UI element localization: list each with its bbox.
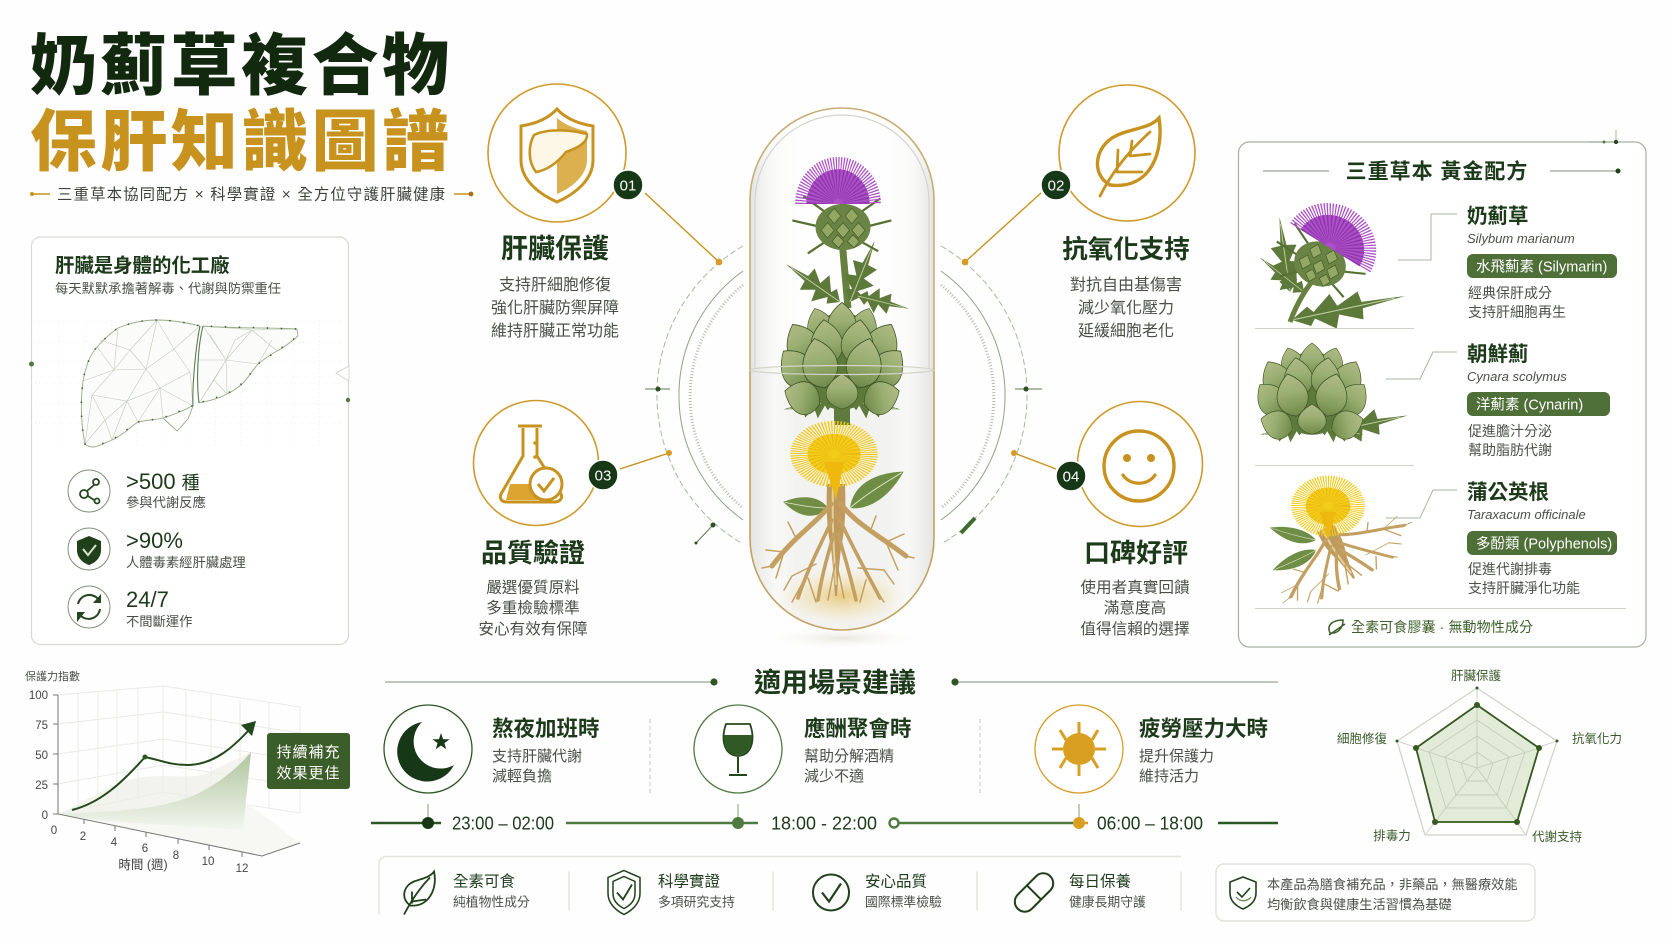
scenario section heading: 適用場景建議 — [754, 668, 916, 698]
callout: 效果更佳 — [276, 765, 341, 782]
disclaimer — [1216, 864, 1535, 921]
herb name: 奶薊草 — [1467, 205, 1528, 228]
chart: protection index over time — [25, 669, 350, 875]
icon: sun — [1035, 705, 1123, 793]
strip title: 安心品質 — [865, 872, 927, 890]
panel footer note: 全素可食膠囊 · 無動物性成分 — [1351, 619, 1533, 635]
feature 04: reviews — [1011, 402, 1202, 638]
badge 01 — [613, 170, 643, 200]
latin name: Silybum marianum — [1467, 231, 1575, 246]
icon: circle check — [813, 874, 849, 910]
herb: dandelion — [1261, 481, 1617, 618]
disclaimer text: 均衡飲食與健康生活習慣為基礎 — [1267, 896, 1452, 912]
capsule with herbs — [750, 108, 934, 650]
growth curve arrow — [72, 721, 256, 810]
scenario section heading — [385, 668, 1278, 698]
herb: milk thistle — [1251, 196, 1617, 337]
scenario text: 減少不適 — [804, 767, 864, 785]
radar labels: 細胞修復 — [1337, 731, 1387, 746]
y tick labels: 75 — [35, 720, 48, 732]
herb benefits — [1468, 285, 1566, 320]
scenario: fatigue — [1035, 705, 1268, 793]
front surface — [58, 752, 251, 830]
x tick labels — [51, 825, 248, 875]
icon: moon and star — [384, 705, 472, 793]
description 04 — [1080, 578, 1190, 638]
radar labels: 肝臟保護 — [1451, 668, 1501, 683]
panel: liver facts — [29, 237, 350, 644]
chart grid — [58, 686, 300, 814]
badge 01: 01 — [620, 178, 636, 194]
scenario text: 支持肝臟代謝 — [492, 748, 582, 765]
axis title y: 保護力指數 — [25, 669, 80, 683]
stat: toxin processing: 人體毒素經肝臟處理 — [126, 555, 246, 570]
leader line — [1386, 490, 1457, 518]
decorative orbit arcs — [645, 246, 1042, 544]
milk thistle plant — [777, 165, 912, 321]
subtitle: 三重草本協同配方 × 科學實證 × 全方位守護肝臟健康 — [57, 184, 445, 204]
strip note: 純植物性成分 — [453, 894, 530, 910]
scenario heading: 疲勞壓力大時 — [1139, 716, 1268, 741]
radar data area — [1416, 705, 1539, 822]
scenario: social drinking — [694, 705, 912, 793]
scenario text: 提升保護力 — [1139, 748, 1214, 765]
capsule floor shadow — [757, 626, 927, 650]
y tick labels: 100 — [29, 690, 48, 702]
icon: capsule — [1011, 869, 1057, 916]
latin name: Cynara scolymus — [1467, 369, 1567, 384]
icon: smile — [1078, 402, 1202, 526]
badge 03: 03 — [595, 468, 611, 484]
x tick labels: 8 — [173, 850, 179, 862]
artichoke plant — [772, 302, 912, 425]
compound pill: 多酚類 (Polyphenols) — [1476, 534, 1612, 552]
herb name: 朝鮮薊 — [1467, 343, 1528, 366]
herb benefits: 幫助脂肪代謝 — [1468, 442, 1552, 458]
heading 04: 口碑好評 — [1084, 538, 1188, 568]
herb benefits: 支持肝臟淨化功能 — [1468, 580, 1580, 596]
x tick labels: 0 — [51, 825, 57, 837]
compound pill — [1467, 392, 1610, 416]
radar labels — [1337, 668, 1622, 844]
x tick labels: 6 — [142, 843, 148, 855]
badge 04 — [1056, 461, 1086, 491]
leader line — [1386, 352, 1457, 379]
leader line — [1398, 214, 1457, 260]
stat: nonstop: 24/7 — [126, 587, 169, 612]
disclaimer text: 本產品為膳食補充品，非藥品，無醫療效能 — [1267, 876, 1518, 892]
axis title x: 時間 (週) — [118, 857, 168, 872]
stat: toxin processing: >90% — [126, 528, 183, 553]
radar chart — [1337, 668, 1622, 844]
strip note: 多項研究支持 — [658, 894, 735, 910]
strip title: 每日保養 — [1069, 872, 1131, 890]
item: science — [608, 870, 735, 914]
description 04: 滿意度高 — [1104, 598, 1166, 617]
y tick labels: 0 — [42, 810, 48, 822]
feature 03: quality — [474, 400, 672, 638]
heading 02: 抗氧化支持 — [1062, 235, 1190, 264]
title — [30, 29, 452, 180]
description 01: 強化肝臟防禦屏障 — [491, 299, 619, 317]
panel: triple herb formula — [1238, 130, 1646, 647]
badge 02 — [1041, 170, 1071, 200]
scenario text: 幫助分解酒精 — [804, 748, 894, 765]
description 01: 維持肝臟正常功能 — [491, 321, 619, 340]
item: vegan — [404, 872, 530, 914]
y tick labels: 25 — [35, 780, 48, 792]
icon: shield — [1230, 877, 1256, 909]
stat: nonstop — [68, 586, 192, 629]
icon: shield check — [608, 870, 640, 914]
time label night: 23:00 – 02:00 — [452, 812, 554, 834]
description 04: 值得信賴的選擇 — [1080, 620, 1190, 638]
scenario text: 減輕負擔 — [492, 768, 552, 785]
description 02 — [1070, 276, 1182, 340]
badge 04: 04 — [1063, 468, 1079, 486]
strip title: 科學實證 — [658, 872, 721, 890]
panel subheading: 每天默默承擔著解毒、代謝與防禦重任 — [55, 281, 281, 296]
panel heading — [1263, 160, 1620, 184]
liver wireframe illustration — [29, 320, 350, 447]
description 02: 對抗自由基傷害 — [1070, 276, 1182, 294]
description 01 — [491, 275, 619, 340]
herb: artichoke — [1249, 343, 1610, 458]
description 01: 支持肝細胞修復 — [499, 275, 611, 294]
connector 02 — [962, 193, 1041, 265]
badge 02: 02 — [1048, 178, 1064, 194]
axes — [53, 695, 300, 857]
title: 奶薊草複合物 — [30, 29, 452, 104]
dandelion plant — [762, 427, 914, 602]
scenario text — [492, 748, 582, 785]
compound pill: 水飛薊素 (Silymarin) — [1476, 258, 1607, 276]
herb benefits — [1468, 561, 1580, 596]
icon: leaf outline — [404, 872, 435, 914]
title: 保肝知識圖譜 — [30, 105, 452, 180]
scenario: late night — [384, 705, 600, 793]
callout: 持續補充 — [276, 744, 341, 761]
icon: leaf — [1059, 85, 1195, 221]
heading 01: 肝臟保護 — [501, 234, 609, 264]
icon: wine glass — [694, 705, 782, 793]
heading 03: 品質驗證 — [481, 538, 585, 568]
description 04: 使用者真實回饋 — [1080, 578, 1190, 596]
time label day: 06:00 – 18:00 — [1097, 812, 1203, 834]
capsule outline — [750, 108, 934, 368]
item: quality — [813, 872, 942, 910]
capsule upper shell — [750, 108, 934, 368]
stat: metabolic reactions — [68, 469, 206, 512]
herb benefits: 促進代謝排毒 — [1468, 561, 1552, 577]
radar labels: 抗氧化力 — [1572, 731, 1622, 746]
panel heading: 肝臟是身體的化工廠 — [55, 254, 230, 277]
strip title: 全素可食 — [453, 872, 516, 890]
scenario heading: 應酬聚會時 — [804, 716, 912, 741]
compound pill — [1467, 254, 1617, 278]
strip note: 國際標準檢驗 — [865, 894, 942, 910]
latin name: Taraxacum officinale — [1467, 507, 1586, 522]
description 03 — [478, 578, 588, 638]
scenario text: 維持活力 — [1139, 768, 1199, 785]
item: daily — [1011, 869, 1146, 916]
y tick labels: 50 — [35, 750, 48, 762]
description 02: 減少氧化壓力 — [1078, 299, 1174, 317]
herb benefits: 支持肝細胞再生 — [1468, 304, 1566, 320]
icon: liver shield — [488, 84, 626, 222]
connector 01 — [645, 193, 722, 265]
description 02: 延緩細胞老化 — [1078, 322, 1174, 340]
x tick labels: 12 — [236, 863, 248, 875]
stat: nonstop: 不間斷運作 — [126, 614, 192, 629]
herb benefits — [1468, 423, 1552, 458]
connector 04 — [1011, 450, 1056, 469]
herb benefits: 經典保肝成分 — [1468, 285, 1552, 301]
timeline — [371, 804, 1278, 834]
radar labels: 代謝支持 — [1532, 829, 1582, 844]
description 03: 嚴選優質原料 — [486, 578, 580, 596]
description 03: 安心有效有保障 — [478, 620, 588, 638]
feature strip — [379, 856, 1181, 916]
description 03: 多重檢驗標準 — [486, 599, 580, 617]
icon: flask with check — [474, 400, 598, 526]
stat: metabolic reactions: >500 種 — [126, 469, 200, 494]
scenario text — [804, 748, 894, 785]
stat: toxin processing — [68, 528, 246, 570]
x tick labels: 2 — [80, 831, 86, 843]
compound pill — [1467, 531, 1617, 555]
disclaimer text — [1267, 876, 1518, 912]
capsule lower shell — [750, 368, 934, 630]
panel heading: 三重草本 黃金配方 — [1346, 160, 1528, 184]
x tick labels: 4 — [111, 837, 118, 849]
herb name: 蒲公英根 — [1467, 481, 1549, 504]
badge 03 — [588, 460, 618, 490]
scenario heading: 熬夜加班時 — [492, 717, 600, 741]
x tick labels: 10 — [202, 856, 214, 868]
strip note: 健康長期守護 — [1069, 894, 1146, 910]
scenario text — [1139, 748, 1214, 785]
back surface — [58, 752, 251, 830]
radar data points — [1396, 686, 1558, 825]
y tick labels — [29, 690, 48, 822]
radar labels: 排毒力 — [1373, 829, 1411, 843]
stat: metabolic reactions: 參與代謝反應 — [126, 494, 206, 510]
feature 02: antioxidant — [962, 85, 1195, 340]
connector 03 — [620, 450, 672, 469]
feature 01: liver protection — [488, 84, 722, 340]
compound pill: 洋薊素 (Cynarin) — [1476, 396, 1583, 414]
herb benefits: 促進膽汁分泌 — [1468, 423, 1552, 439]
time label evening: 18:00 - 22:00 — [771, 812, 877, 834]
callout — [267, 733, 350, 789]
